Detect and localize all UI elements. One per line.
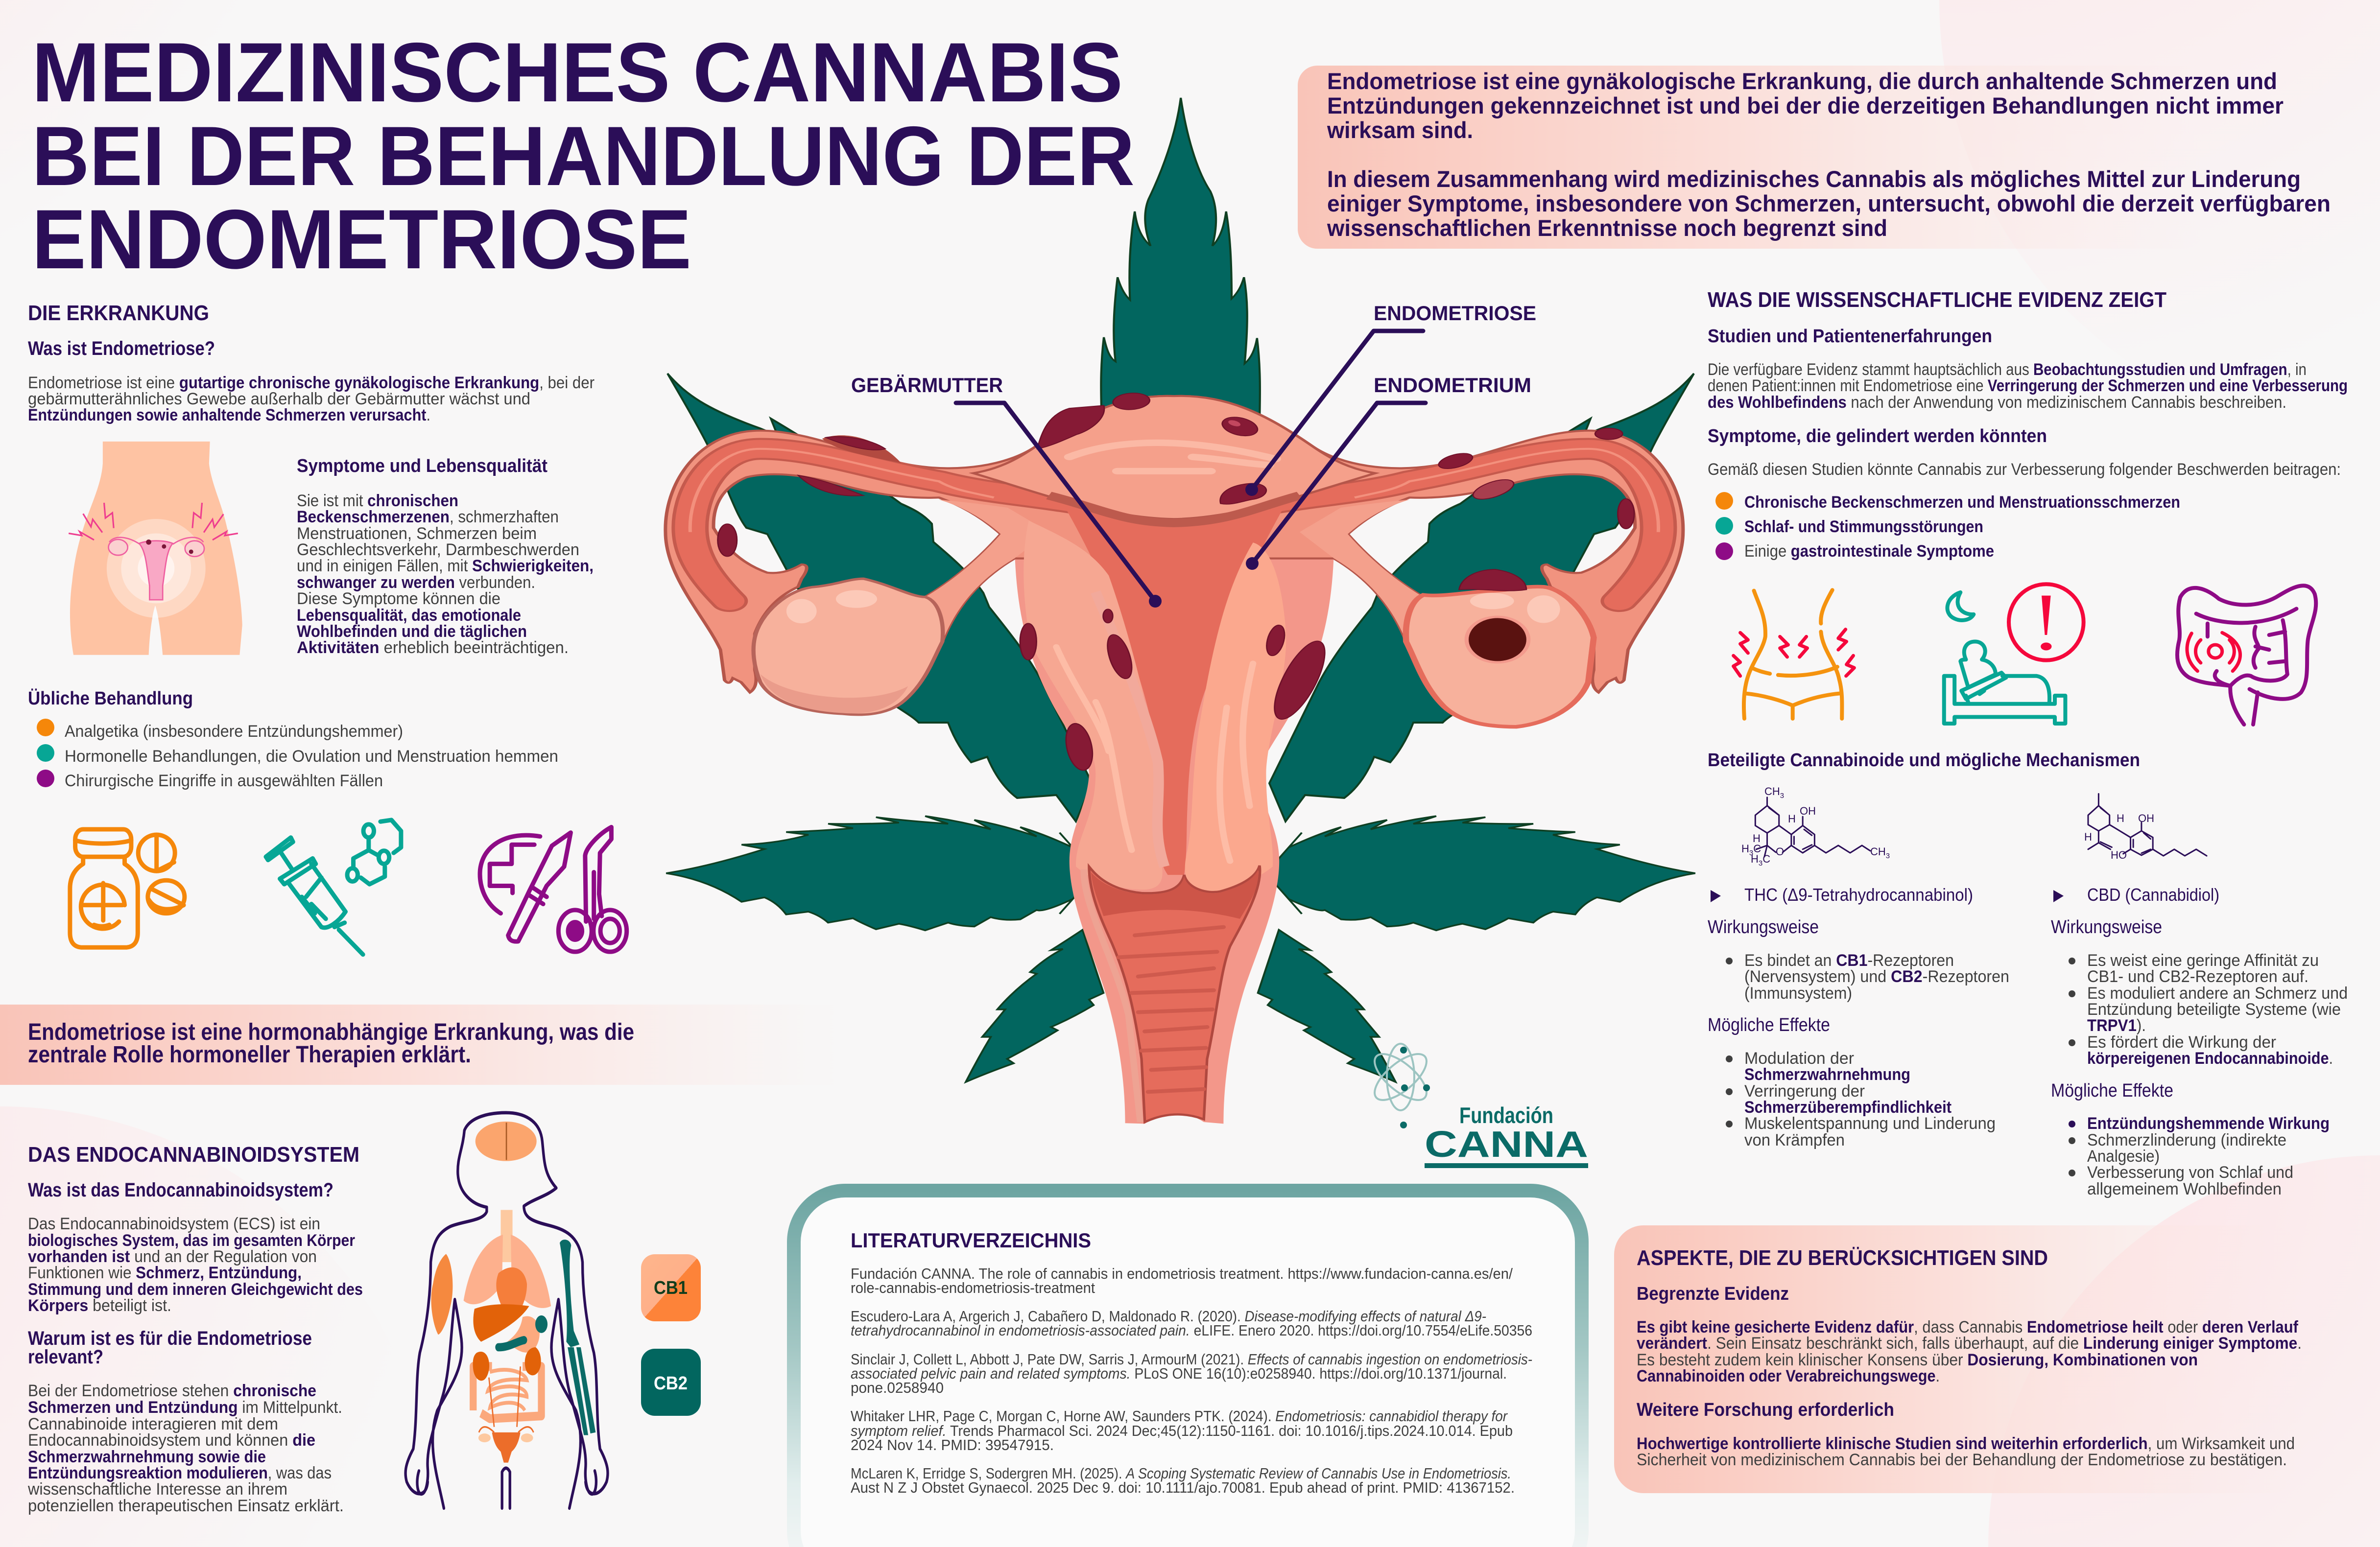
molecule: THC: 3	[1886, 852, 1890, 860]
text block: gebärmutterähnliches Gewebe außerhalb der Gebärmutter wächst und	[28, 390, 530, 408]
subheading: Beteiligte Cannabinoide und mögliche Mechanismen	[1708, 750, 2140, 771]
organ: intestine	[473, 1366, 542, 1419]
panel: Literaturverzeichnis	[794, 1191, 1582, 1547]
panel: wissenschaftliche Evidenz	[1708, 288, 2348, 1198]
organ: pancreas	[499, 1340, 524, 1347]
subheading: Was ist das Endocannabinoidsystem?	[28, 1179, 333, 1201]
subheading: Mögliche Effekte	[1708, 1015, 1830, 1035]
molecule: THC: 3	[1759, 859, 1762, 867]
treatment list	[37, 719, 558, 790]
molecule: THC: C	[1753, 843, 1761, 855]
references list: Fundación CANNA. The role of cannabis in endometriosis treatment. https://www.fundacion-canna.es/en/	[851, 1265, 1513, 1282]
symptom list	[1715, 492, 2180, 561]
title	[32, 25, 1135, 286]
subheading	[28, 1328, 312, 1368]
text block: Symptome: Wohlbefinden und die täglichen	[297, 622, 527, 641]
molecule: CBD: H	[2117, 812, 2124, 824]
text block: Symptome: Geschlechtsverkehr, Darmbeschwerden	[297, 540, 579, 559]
uterine cavity (endometrium)	[1043, 471, 1306, 875]
arrow marker	[2053, 890, 2064, 902]
cannabinoid name: THC (Δ9-Tetrahydrocannabinol)	[1744, 885, 1973, 905]
panel: intro callout: einiger Symptome, insbesondere von Schmerzen, untersucht, obwohl die derzeit verfügbaren	[1327, 190, 2331, 216]
molecule: CBD: H	[2084, 831, 2092, 843]
heading: DIE ERKRANKUNG	[28, 301, 209, 325]
text block: Entzündungsreaktion modulieren, was das	[28, 1464, 332, 1482]
text block: Endometriose ist eine gutartige chronische gynäkologische Erkrankung, bei der	[28, 374, 595, 392]
symptom list: Einige gastrointestinale Symptome	[1744, 542, 1994, 561]
anatomy: muscle	[431, 1254, 452, 1335]
icon: medication bottle and pills	[70, 829, 185, 947]
text block: verändert. Sein Einsatz beschränkt sich, falls überhaupt, auf die Linderung einiger Symptome.	[1637, 1334, 2302, 1353]
callout: hormonabhängige Erkrankung	[0, 1005, 842, 1085]
callout lines and anatomical labels: GEBÄRMUTTER	[851, 374, 1003, 397]
text block: Symptome: Lebensqualität, das emotionale	[297, 606, 521, 625]
receptor: CB1	[641, 1254, 701, 1321]
bullet list: TRPV1).	[2087, 1016, 2146, 1035]
molecule: THC: H	[1741, 843, 1749, 855]
treatment list: Chirurgische Eingriffe in ausgewählten Fällen	[65, 772, 383, 790]
fundus dome	[973, 396, 1375, 519]
heading: ASPEKTE, DIE ZU BERÜCKSICHTIGEN SIND	[1637, 1246, 2048, 1270]
text block: Cannabinoide interagieren mit dem	[28, 1415, 278, 1433]
symptom list: Schlaf- und Stimmungsstörungen	[1744, 517, 1983, 536]
bullet list: (Nervensystem) und CB2-Rezeptoren	[1744, 967, 2009, 986]
bullet list	[2069, 1114, 2330, 1198]
text block: Hochwertige kontrollierte klinische Studien sind weiterhin erforderlich, um Wirksamkeit und	[1637, 1434, 2295, 1453]
receptor: CB2: CB2	[654, 1373, 688, 1394]
icon: gastrointestinal symptoms	[2177, 586, 2316, 725]
organ: lungs	[464, 1235, 551, 1308]
illustration: cannabis leaf background	[666, 98, 1695, 1082]
column: THC	[1708, 885, 2009, 1149]
molecule: CBD	[2084, 794, 2207, 861]
text block: Schmerzen und Entzündung im Mittelpunkt.	[28, 1398, 342, 1417]
subheading: Symptome, die gelindert werden könnten	[1708, 426, 2047, 446]
molecule: THC: CH	[1870, 845, 1886, 858]
text block: Entzündungen sowie anhaltende Schmerzen verursacht.	[28, 406, 430, 424]
text block	[28, 374, 595, 424]
text block	[1637, 1318, 2302, 1385]
title: ENDOMETRIOSE	[32, 192, 691, 286]
subheading: Mögliche Effekte	[2051, 1080, 2173, 1101]
bullet list: Modulation der	[1744, 1049, 1854, 1068]
references list: pone.0258940	[851, 1379, 944, 1396]
references list: Aust N Z J Obstet Gynaecol. 2025 Dec 9. doi: 10.1111/ajo.70081. Epub ahead of print. PMID: 41367152.	[851, 1479, 1515, 1496]
subheading: Übliche Behandlung	[28, 688, 193, 709]
panel: intro callout: In diesem Zusammenhang wird medizinisches Cannabis als mögliches Mittel zur Linderung	[1327, 166, 2301, 192]
panel: intro callout: wissenschaftlichen Erkenntnisse noch begrenzt sind	[1327, 215, 1887, 241]
symptom list: Chronische Beckenschmerzen und Menstruationsschmerzen	[1744, 493, 2180, 512]
text block: Schmerzwahrnehmung sowie die	[28, 1448, 266, 1466]
text block: biologisches System, das im gesamten Körper	[28, 1231, 355, 1250]
receptor: CB2	[641, 1349, 701, 1416]
panel: die Erkrankung	[28, 301, 595, 657]
organ: stomach and spleen	[507, 1316, 540, 1353]
molecule: THC: 3	[1780, 792, 1784, 800]
heading: DAS ENDOCANNABINOIDSYSTEM	[28, 1143, 359, 1167]
bullet list: Entzündungshemmende Wirkung	[2087, 1114, 2330, 1133]
text block: Sicherheit von medizinischem Cannabis bei der Behandlung der Endometriose zu bestätigen.	[1637, 1451, 2287, 1469]
bullet list: Entzündung beteiligte Systeme (wie	[2087, 1000, 2341, 1019]
text block: potenziellen therapeutischen Einsatz erklärt.	[28, 1497, 344, 1515]
text block: Symptome: schwanger zu werden verbunden.	[297, 573, 535, 592]
ovary right with endometrioma	[1406, 586, 1594, 727]
title: BEI DER BEHANDLUNG DER	[32, 109, 1135, 203]
text block: Endocannabinoidsystem und können die	[28, 1431, 315, 1450]
text block	[28, 1215, 363, 1315]
bullet list: Muskelentspannung und Linderung	[1744, 1114, 1996, 1133]
panel: intro callout: Endometriose ist eine gynäkologische Erkrankung, die durch anhaltende Schmerzen und	[1327, 68, 2277, 94]
text block: Es besteht zudem kein klinischer Konsens über Dosierung, Kombinationen von	[1637, 1351, 2198, 1369]
bullet list: CB1- und CB2-Rezeptoren auf.	[2087, 967, 2309, 986]
treatment list: Hormonelle Behandlungen, die Ovulation und Menstruation hemmen	[65, 747, 558, 766]
references list: Sinclair J, Collett L, Abbott J, Pate DW, Sarris J, ArmourM (2021). Effects of cannabis ingestion on endometriosis-	[851, 1351, 1532, 1368]
text block	[1708, 360, 2348, 412]
icon: pelvis with pain	[69, 442, 242, 655]
text block: Symptome: und in einigen Fällen, mit Schwierigkeiten,	[297, 557, 594, 575]
subheading: Symptome: Symptome und Lebensqualität	[297, 456, 547, 476]
bullet list	[2069, 951, 2348, 1068]
subheading: Weitere Forschung erforderlich	[1637, 1400, 1894, 1420]
text block	[27, 1382, 344, 1515]
subheading: Wirkungsweise	[1708, 917, 1819, 938]
molecule: THC	[1741, 785, 1890, 867]
bullet list: von Krämpfen	[1744, 1131, 1845, 1149]
text block: wissenschaftliche Interesse an ihrem	[27, 1480, 287, 1499]
subheading: Was ist Endometriose?	[28, 338, 215, 359]
subheading: Begrenzte Evidenz	[1637, 1284, 1789, 1304]
title: MEDIZINISCHES CANNABIS	[32, 25, 1123, 119]
subheading: Warum ist es für die Endometriose	[28, 1328, 312, 1349]
references list: tetrahydrocannabinol in endometriosis-associated pain. eLIFE. Enero 2020. https://doi.org/10.7554/eLife.50356	[851, 1322, 1532, 1339]
vaginal canal	[1084, 869, 1140, 1122]
molecule: CBD: OH	[2138, 812, 2154, 824]
cannabinoid name: CBD (Cannabidiol)	[2087, 885, 2219, 905]
bullet list: Es fördert die Wirkung der	[2087, 1033, 2276, 1052]
logo: Fundación CANNA: Fundación	[1459, 1102, 1553, 1128]
subheading: Wirkungsweise	[2051, 917, 2162, 938]
icon: syringe and hormone molecule	[266, 820, 401, 955]
panel: intro callout: wirksam sind.	[1327, 117, 1473, 143]
panel: Endocannabinoidsystem	[27, 1113, 701, 1515]
organ: thyroid and airway	[499, 1210, 514, 1262]
arrow marker	[1711, 890, 1721, 902]
text block: Körpers beteiligt ist.	[28, 1296, 171, 1315]
bullet list: Es moduliert andere an Schmerz und	[2087, 984, 2348, 1003]
text block: Die verfügbare Evidenz stammt hauptsächlich aus Beobachtungsstudien und Umfragen, in	[1708, 360, 2307, 379]
text block: Symptome: Menstruationen, Schmerzen beim	[297, 524, 537, 543]
panel: intro callout	[1298, 66, 2331, 249]
organ: liver	[473, 1304, 529, 1342]
subheading: Studien und Patientenerfahrungen	[1708, 326, 1992, 347]
text block: vorhanden ist und an der Regulation von	[28, 1247, 317, 1266]
receptor: CB1: CB1	[654, 1278, 688, 1298]
text block: Symptome: Beckenschmerzenen, schmerzhaften	[297, 508, 559, 526]
text block: Bei der Endometriose stehen chronische	[28, 1382, 316, 1400]
panel: Aspekte, die zu berücksichtigen sind	[1614, 1225, 2302, 1493]
references list: role-cannabis-endometriosis-treatment	[851, 1279, 1095, 1296]
logo: Fundación CANNA: CANNA	[1425, 1124, 1588, 1165]
panel: intro callout: Entzündungen gekennzeichnet ist und bei der die derzeitigen Behandlungen nicht immer	[1327, 93, 2284, 118]
bullet list: körpereigenen Endocannabinoide.	[2087, 1049, 2333, 1068]
subheading: relevant?	[28, 1346, 103, 1368]
molecule: THC: OH	[1800, 805, 1816, 817]
text block: Cannabinoiden oder Verabreichungswege.	[1637, 1367, 1940, 1385]
references list: symptom relief. Trends Pharmacol Sci. 2024 Dec;45(12):1150-1161. doi: 10.1016/j.tips.2024.10.014. Epub	[851, 1422, 1513, 1439]
bullet list: Verringerung der	[1744, 1082, 1865, 1101]
text block: des Wohlbefindens nach der Anwendung von medizinischem Cannabis beschreiben.	[1708, 393, 2286, 412]
text block: Symptome: Aktivitäten erheblich beeinträchtigen.	[297, 638, 569, 657]
text block: Es gibt keine gesicherte Evidenz dafür, dass Cannabis Endometriose heilt oder deren Verlauf	[1637, 1318, 2299, 1336]
bullet list	[1726, 951, 2009, 1003]
organ: reproductive	[492, 1432, 521, 1463]
callout: hormonabhängige Erkrankung: zentrale Rolle hormoneller Therapien erklärt.	[28, 1042, 471, 1068]
references list: Escudero-Lara A, Argerich J, Cabañero D, Maldonado R. (2020). Disease-modifying effects of natural Δ9-	[851, 1308, 1486, 1325]
molecule: THC: CH	[1764, 785, 1780, 797]
text block: Stimmung und dem inneren Gleichgewicht des	[28, 1280, 363, 1299]
bullet list	[1726, 1049, 1996, 1149]
organ: kidneys	[473, 1347, 541, 1381]
text block: Symptome: Diese Symptome können die	[297, 589, 500, 608]
molecule: THC: C	[1762, 853, 1770, 865]
icon: pelvic pain	[1734, 590, 1854, 719]
bullet list: Es bindet an CB1-Rezeptoren	[1744, 951, 1954, 970]
molecule: THC: H	[1753, 832, 1761, 844]
text block	[1637, 1434, 2295, 1469]
bullet list: (Immunsystem)	[1744, 984, 1852, 1003]
panel: übliche Behandlung	[28, 688, 627, 955]
molecule: THC: H	[1788, 813, 1796, 825]
treatment list: Analgetika (insbesondere Entzündungshemmer)	[65, 722, 403, 741]
illustration: uterus with endometriosis lesions	[666, 391, 1683, 1124]
text block: Funktionen wie Schmerz, Entzündung,	[28, 1264, 302, 1282]
molecule: THC: O	[1776, 845, 1784, 858]
bullet list: allgemeinem Wohlbefinden	[2087, 1180, 2282, 1198]
logo: Fundación CANNA	[1367, 1044, 1588, 1168]
callout: hormonabhängige Erkrankung: Endometriose ist eine hormonabhängige Erkrankung, was die	[28, 1019, 634, 1045]
callout lines and anatomical labels: ENDOMETRIUM	[1374, 374, 1531, 397]
text block: Symptome	[297, 492, 594, 657]
bullet list: Schmerzwahrnehmung	[1744, 1065, 1910, 1084]
references list: 2024 Nov 14. PMID: 39547915.	[851, 1436, 1054, 1453]
organ: brain	[476, 1122, 537, 1161]
molecule: CBD: HO	[2111, 849, 2127, 861]
text block: Das Endocannabinoidsystem (ECS) ist ein	[28, 1215, 320, 1233]
references list	[851, 1265, 1532, 1496]
organ: heart	[496, 1267, 527, 1320]
anatomy: arm bones	[560, 1240, 595, 1435]
heading: LITERATURVERZEICHNIS	[851, 1229, 1091, 1252]
bullet list: Analgesie)	[2087, 1147, 2160, 1166]
icon: surgery scalpel and scissors	[480, 827, 627, 952]
bullet list: Schmerzlinderung (indirekte	[2087, 1131, 2286, 1149]
references list: McLaren K, Erridge S, Sodergren MH. (2025). A Scoping Systematic Review of Cannabis Use in Endometriosis.	[851, 1465, 1511, 1482]
callout lines and anatomical labels	[851, 302, 1536, 608]
endometriosis lesions	[1037, 405, 1104, 449]
icon: sleep disturbance	[1944, 584, 2084, 724]
bullet list: Es weist eine geringe Affinität zu	[2087, 951, 2319, 970]
figure: female body with organs	[405, 1113, 608, 1508]
references list: Whitaker LHR, Page C, Morgan C, Horne AW, Saunders PTK. (2024). Endometriosis: cannabidiol therapy for	[851, 1407, 1508, 1425]
references list: associated pelvic pain and related symptoms. PLoS ONE 16(10):e0258940. https://doi.org/10.1371/journal.	[851, 1365, 1507, 1382]
ovary left	[754, 579, 943, 715]
bullet list: Verbesserung von Schlaf und	[2087, 1163, 2293, 1182]
column: CBD	[2051, 885, 2348, 1198]
text block: Symptome: Sie ist mit chronischen	[297, 492, 458, 510]
heading: WAS DIE WISSENSCHAFTLICHE EVIDENZ ZEIGT	[1708, 288, 2166, 312]
molecule: THC: 3	[1749, 849, 1753, 857]
molecule: THC: H	[1751, 853, 1759, 865]
callout lines and anatomical labels: ENDOMETRIOSE	[1374, 302, 1536, 325]
bullet list: Schmerzüberempfindlichkeit	[1744, 1098, 1952, 1117]
